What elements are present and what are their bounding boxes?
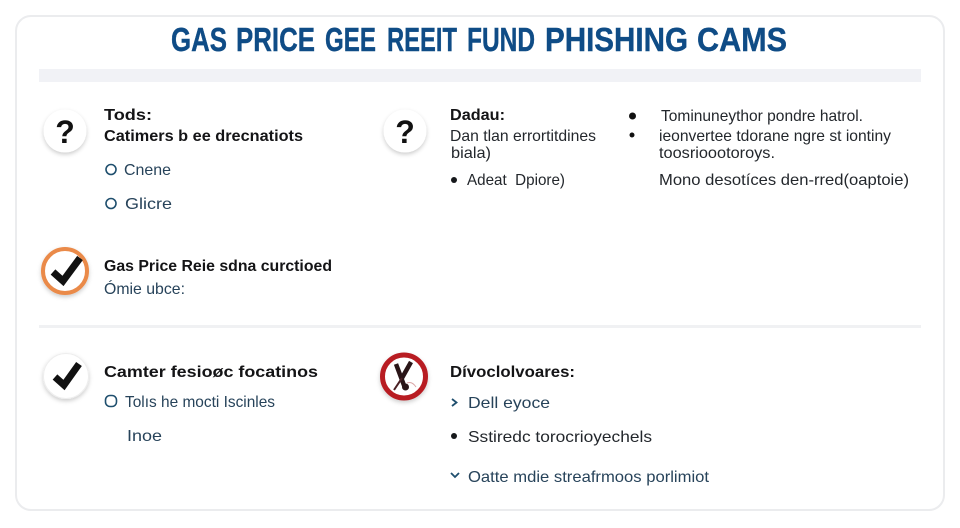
heading: details: Dadau: — [450, 107, 505, 124]
list item: third: Oatte mdie streafrmoos porlimiot — [468, 469, 710, 486]
panel: gas price confirmed — [43, 249, 332, 298]
panel: right column notes — [629, 108, 909, 189]
list item: first: Tominuneythor pondre hatrol. — [661, 108, 863, 125]
list item: Tolıs he mocti Iscinles — [125, 394, 275, 411]
list item: second — [630, 128, 891, 162]
heading: Dívoclolvoares: — [450, 364, 575, 381]
title: PRICE — [236, 21, 315, 58]
icon: question mark — [44, 110, 86, 152]
header band — [39, 69, 921, 82]
heading: Camter fesioøc focatinos — [104, 364, 318, 381]
list item: second: toosrioootoroys. — [659, 145, 775, 162]
note text: Mono desotíces den-rred(oaptoie) — [659, 172, 909, 189]
panel: customer locations — [44, 354, 318, 445]
list item: first: Dell eyoce — [468, 395, 550, 412]
body text — [450, 128, 596, 162]
list item: second: Sstiredc torocrioyechels — [468, 429, 652, 446]
title: CAMS — [697, 21, 787, 58]
title: PHISHING — [545, 21, 688, 58]
section divider — [39, 325, 921, 328]
list item: Adeat Dpiore) — [467, 172, 565, 189]
heading: Gas Price Reie sdna curctioed — [104, 258, 332, 275]
list item: second — [106, 196, 172, 213]
sub text: Ómie ubce: — [104, 279, 185, 298]
panel: tools question — [44, 107, 303, 213]
panel: disclosures — [382, 355, 710, 486]
list item continuation: Inoe — [127, 428, 162, 445]
icon: orange check — [43, 249, 87, 293]
icon: question mark — [384, 110, 426, 152]
body text: Dan tlan errortitdines — [450, 128, 596, 145]
panel: details question — [384, 107, 596, 189]
list item: first: Cnene — [124, 162, 171, 179]
list item: second: Glicre — [125, 196, 172, 213]
icon: question mark: ? — [395, 114, 415, 150]
title: REEIT — [387, 21, 457, 58]
subheading: Catimers b ee drecnatiots — [104, 128, 303, 145]
body text: biala) — [451, 145, 491, 162]
title — [171, 21, 787, 58]
icon: question mark: ? — [55, 114, 75, 150]
title: GAS — [171, 21, 227, 58]
heading: tools: Tods: — [104, 107, 152, 124]
title: GEE — [325, 21, 376, 58]
icon: prohibited cross — [382, 355, 426, 398]
list item: second: ieonvertee tdorane ngre st iontiny — [659, 128, 891, 145]
title: FUND — [467, 21, 535, 58]
icon: check — [44, 354, 88, 398]
